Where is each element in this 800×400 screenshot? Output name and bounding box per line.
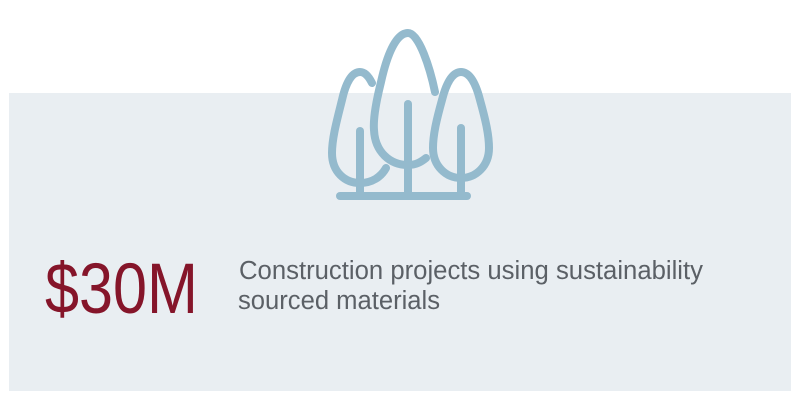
- panel: background: [9, 93, 791, 391]
- icon: ground line: [340, 192, 467, 200]
- icon: middle tree: [374, 33, 435, 196]
- description line 2: sourced materials: [238, 287, 440, 315]
- description text: [238, 257, 703, 315]
- stat value: $30M: [45, 250, 198, 329]
- icon: right tree: [433, 72, 489, 196]
- icon: three trees: [332, 33, 489, 196]
- description line 1: Construction projects using sustainability: [239, 257, 703, 285]
- icon: left tree: [332, 72, 386, 196]
